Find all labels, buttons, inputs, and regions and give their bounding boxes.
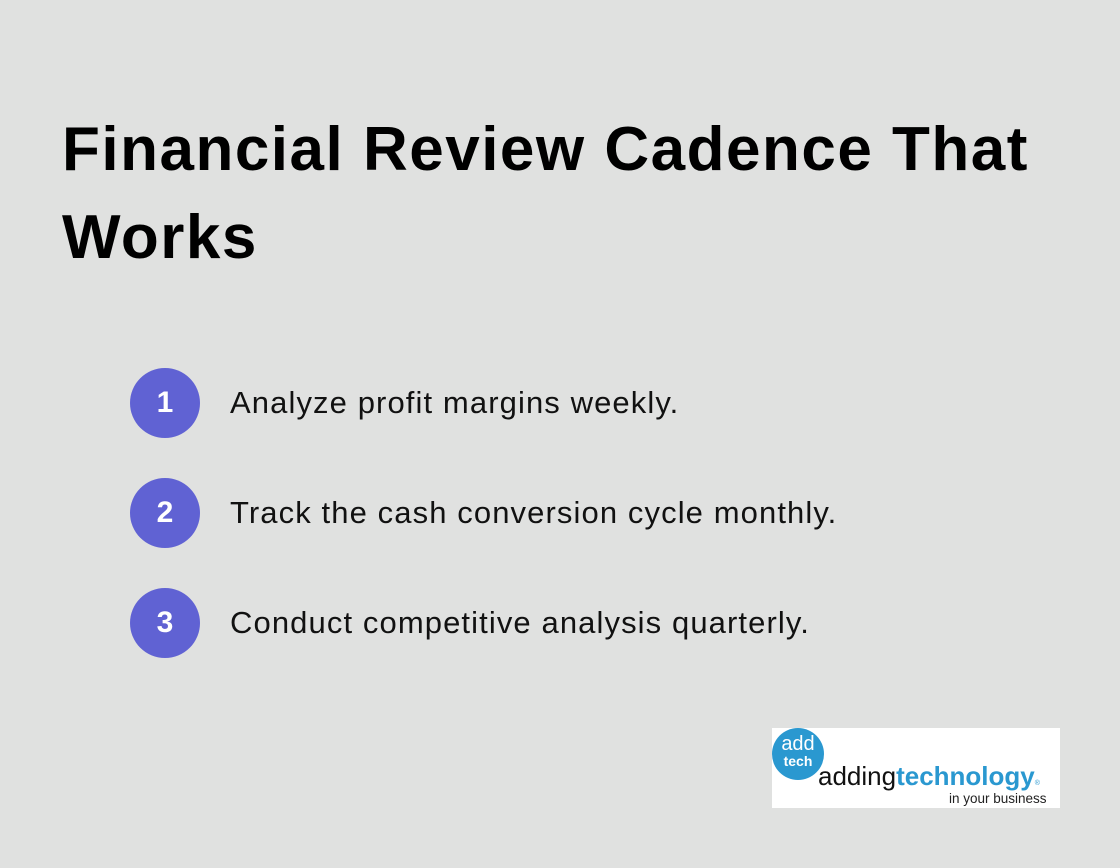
item 1: Analyze profit margins weekly. bbox=[230, 385, 679, 420]
item 2: Track the cash conversion cycle monthly. bbox=[230, 495, 837, 530]
badge 1 bbox=[130, 368, 200, 438]
logo circle: tech bbox=[784, 753, 812, 769]
logo tagline: in your business bbox=[949, 791, 1047, 806]
logo wordmark: addingtechnology® bbox=[818, 761, 1040, 791]
item 2 bbox=[130, 478, 837, 548]
title bbox=[62, 115, 1029, 272]
title: Works bbox=[62, 203, 258, 272]
item 3 bbox=[130, 588, 810, 658]
title: Financial Review Cadence That bbox=[62, 115, 1029, 184]
badge 3: 3 bbox=[157, 606, 173, 639]
badge 2 bbox=[130, 478, 200, 548]
badge 3 bbox=[130, 588, 200, 658]
logo bbox=[772, 728, 1060, 808]
item 3: Conduct competitive analysis quarterly. bbox=[230, 605, 810, 640]
logo circle bbox=[772, 728, 824, 780]
logo circle: add bbox=[781, 733, 815, 755]
badge 2: 2 bbox=[157, 496, 173, 529]
item 1 bbox=[130, 368, 679, 438]
badge 1: 1 bbox=[157, 386, 173, 419]
